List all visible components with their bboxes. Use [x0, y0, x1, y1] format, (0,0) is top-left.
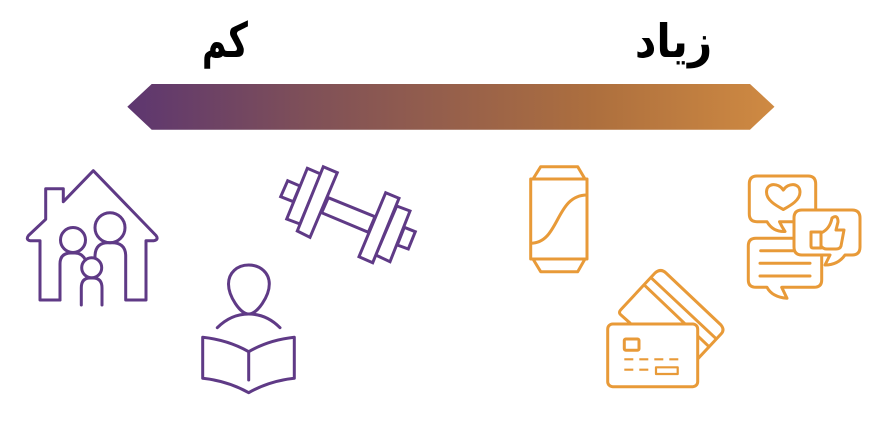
card number dashes [624, 359, 678, 370]
thumbs up [811, 217, 844, 249]
card chip [624, 339, 639, 350]
heading: less: کم [202, 12, 249, 69]
icon: person reading a book [203, 265, 294, 393]
bubble with chat lines [748, 238, 822, 298]
heart [766, 185, 800, 210]
bubble with thumbs up [794, 210, 860, 265]
chat lines [760, 251, 810, 276]
card signature box [656, 367, 678, 374]
icon: family in house [27, 171, 157, 305]
icon: social media chat bubbles [748, 176, 860, 298]
front card [608, 324, 698, 387]
gradient double arrow scale [127, 84, 775, 130]
bubble with heart [749, 176, 816, 232]
icon: credit cards [608, 270, 723, 387]
icon: dumbbell [281, 167, 415, 263]
heading: more: زیاد [635, 15, 712, 69]
icon: soda can [531, 167, 587, 272]
